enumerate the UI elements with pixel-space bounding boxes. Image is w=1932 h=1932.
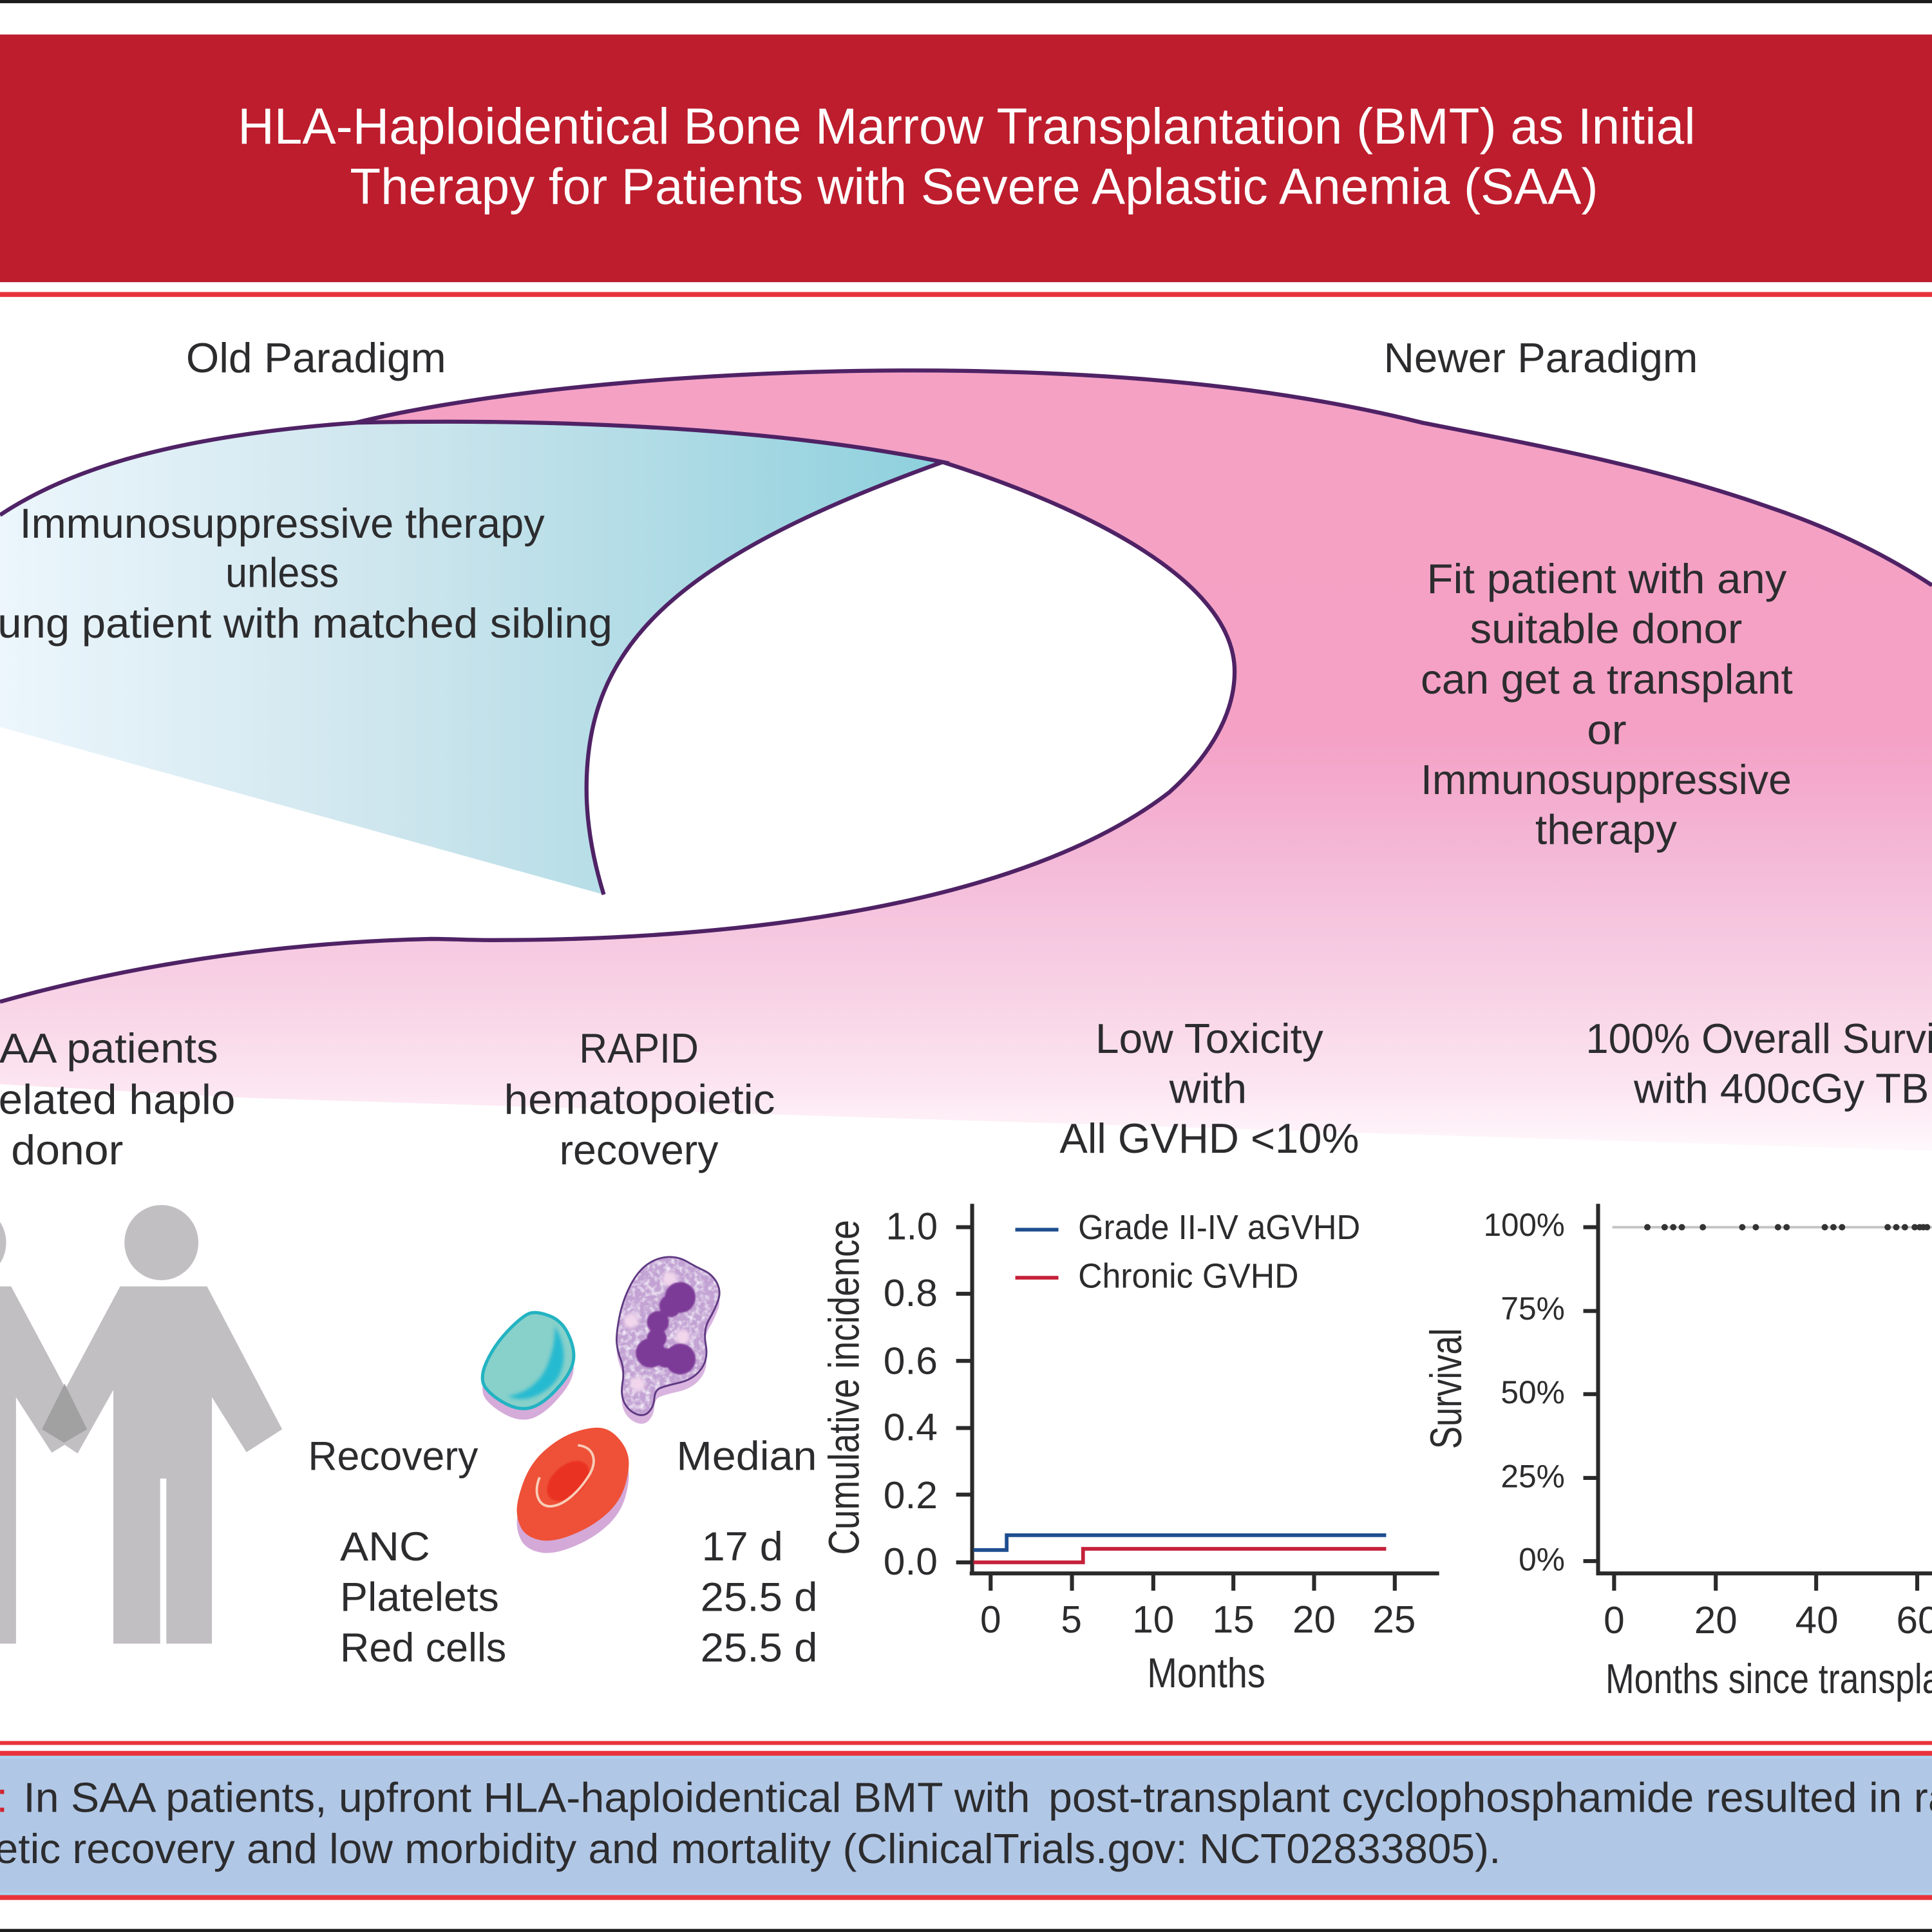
text block: newer paradigm therapy: Fit patient with any <box>1427 555 1787 602</box>
icon: neutrophil purple cell <box>616 1257 719 1424</box>
chart: overall survival <box>1421 1204 1932 1702</box>
text block: newer paradigm therapy <box>1421 555 1793 853</box>
text block: low toxicity: All GVHD <10% <box>1059 1115 1359 1162</box>
text block: newer paradigm therapy: or <box>1587 706 1627 753</box>
panel: conclusion band <box>0 1751 1932 1900</box>
x-axis tick labels: 0 <box>980 1598 1001 1641</box>
y-axis tick labels: 50% <box>1501 1374 1565 1410</box>
x-axis tick labels <box>1604 1598 1932 1642</box>
top black rule <box>0 0 1932 3</box>
text block: newer paradigm therapy: therapy <box>1535 806 1677 853</box>
text block: rapid recovery: recovery <box>560 1126 719 1173</box>
text block: low toxicity: with <box>1169 1065 1247 1112</box>
icon: monocyte teal cell <box>482 1312 574 1419</box>
bottom black rule <box>0 1929 1932 1932</box>
text block: donor: donor <box>11 1126 123 1173</box>
y-axis tick labels: 100% <box>1484 1207 1565 1243</box>
y-axis tick labels: 0.4 <box>884 1406 938 1449</box>
text block: recovery table: Platelets <box>340 1575 499 1620</box>
chart legend: Chronic GVHD <box>1078 1257 1299 1295</box>
title <box>238 98 1696 215</box>
survival line with censor marks <box>1613 1224 1932 1231</box>
chart: cumulative incidence of GVHD <box>820 1204 1439 1696</box>
text block: recovery table: 25.5 d <box>701 1575 817 1620</box>
text block: low toxicity: Low Toxicity <box>1095 1015 1323 1062</box>
text block: rapid recovery: hematopoietic <box>504 1076 775 1123</box>
y-axis title: Cumulative incidence <box>820 1220 869 1555</box>
x-axis tick labels: 10 <box>1132 1598 1174 1641</box>
icon: two people holding hands <box>0 1205 282 1643</box>
chart legend: Grade II-IV aGVHD <box>1078 1209 1360 1247</box>
text block: newer paradigm therapy: can get a transplant <box>1421 656 1793 703</box>
text block: recovery table: 17 d <box>702 1524 783 1569</box>
y-axis title: Survival <box>1421 1329 1471 1449</box>
diagram: pink newer paradigm band <box>0 370 1932 1151</box>
text block: rapid recovery: RAPID <box>579 1025 699 1072</box>
text block: low toxicity <box>1059 1015 1359 1162</box>
x-axis tick labels: 5 <box>1061 1598 1082 1641</box>
x-axis tick labels: 40 <box>1795 1598 1839 1642</box>
text block: recovery table <box>308 1434 817 1671</box>
text block: recovery table: ANC <box>340 1524 430 1569</box>
text block: old paradigm therapy <box>0 500 612 647</box>
y-axis tick labels: 0% <box>1519 1541 1565 1577</box>
x-axis tick labels: 25 <box>1372 1598 1416 1641</box>
text block: overall survival <box>1586 1015 1932 1112</box>
diagram: teal old paradigm band <box>0 422 943 895</box>
text block: donor <box>0 1025 235 1173</box>
heading: old paradigm: Old Paradigm <box>186 334 446 381</box>
conclusion text <box>0 1774 1932 1872</box>
panel: header band <box>0 35 1932 282</box>
x-axis tick labels: 0 <box>1604 1598 1625 1642</box>
y-axis tick labels <box>1484 1207 1565 1577</box>
text block: newer paradigm therapy: suitable donor <box>1470 605 1742 652</box>
conclusion text: In SAA patients, upfront HLA-haploidentical BMT with <box>23 1774 1030 1821</box>
y-axis tick labels: 0.2 <box>884 1473 938 1517</box>
y-axis tick labels: 1.0 <box>886 1205 938 1248</box>
text block: old paradigm therapy: Immunosuppressive therapy <box>20 500 545 547</box>
footer top rule <box>0 1741 1932 1745</box>
chart legend <box>1016 1209 1360 1295</box>
icon: red blood cell <box>517 1428 629 1553</box>
x-axis tick labels: 15 <box>1213 1598 1255 1641</box>
y-axis tick labels: 75% <box>1501 1291 1565 1327</box>
text block: recovery table: Red cells <box>340 1625 506 1671</box>
text block: newer paradigm therapy: Immunosuppressive <box>1421 756 1792 803</box>
x-axis tick labels <box>980 1598 1416 1641</box>
text block: rapid recovery <box>504 1025 775 1173</box>
x-axis title: Months <box>1147 1649 1265 1696</box>
header rule <box>0 292 1932 297</box>
text block: recovery table: Recovery <box>308 1434 478 1479</box>
title: Therapy for Patients with Severe Aplastic Anemia (SAA) <box>350 158 1598 215</box>
x-axis tick labels: 20 <box>1694 1598 1738 1642</box>
y-axis tick labels: 0.0 <box>884 1540 938 1583</box>
text block: recovery table: Median <box>676 1434 817 1479</box>
chart lines: aGVHD and chronic GVHD <box>973 1535 1386 1562</box>
y-axis tick labels: 0.6 <box>884 1339 938 1382</box>
text block: old paradigm therapy: unless <box>225 549 339 596</box>
x-axis tick labels: 20 <box>1293 1598 1336 1641</box>
y-axis tick labels: 0.8 <box>884 1271 938 1314</box>
y-axis tick labels: 25% <box>1501 1458 1565 1494</box>
title: HLA-Haploidentical Bone Marrow Transplantation (BMT) as Initial <box>238 98 1696 155</box>
text block: recovery table: 25.5 d <box>701 1625 817 1671</box>
y-axis tick labels <box>884 1205 938 1583</box>
text block: overall survival: with 400cGy TBI <box>1633 1065 1932 1112</box>
heading: newer paradigm: Newer Paradigm <box>1384 334 1698 381</box>
